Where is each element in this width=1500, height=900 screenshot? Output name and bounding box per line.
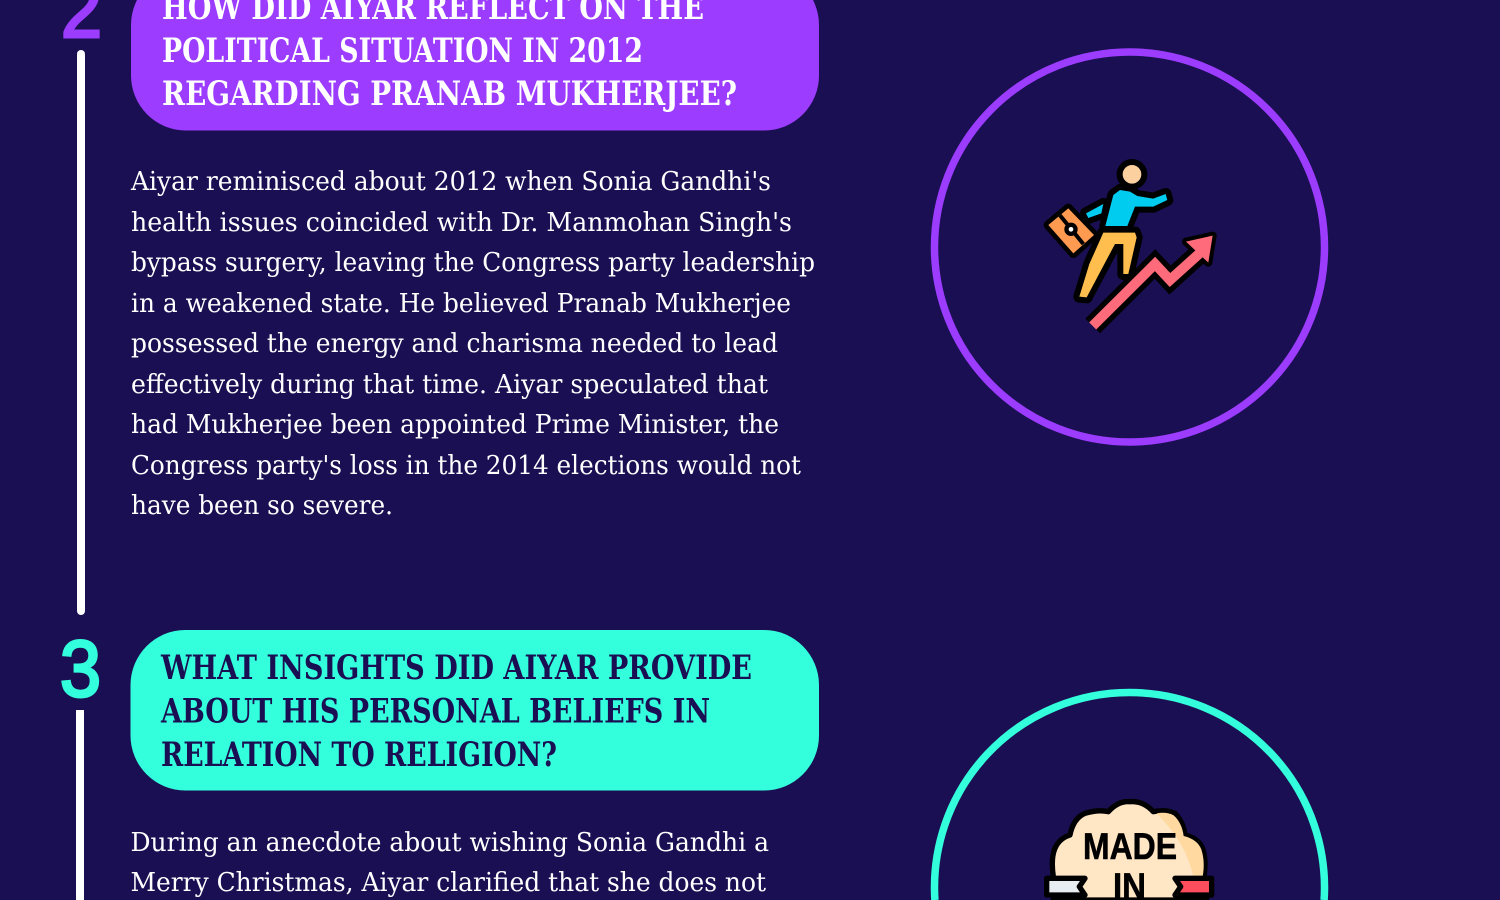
icon part: legs xyxy=(1079,233,1137,297)
badge shaded edge xyxy=(1157,813,1204,877)
icon part: briefcase xyxy=(1048,208,1094,253)
badge scalloped body xyxy=(1052,802,1207,900)
section 2 body text xyxy=(130,167,815,521)
badge text xyxy=(1083,826,1177,900)
section 2 heading pill xyxy=(131,0,819,130)
section 3 heading pill xyxy=(130,630,819,790)
section 3 body text: During an anecdote about wishing Sonia Gandhi a xyxy=(130,828,769,858)
timeline line: section 3 xyxy=(76,710,84,900)
section 3 icon circle xyxy=(935,693,1324,900)
icon: businessman climbing rising arrow xyxy=(1048,165,1213,326)
section 2 body text: Congress party's loss in the 2014 elections would not xyxy=(131,451,802,481)
section 2 heading pill: POLITICAL SITUATION IN 2012 xyxy=(162,31,643,70)
section 2 body text: effectively during that time. Aiyar speculated that xyxy=(131,370,769,400)
icon: made in badge xyxy=(1047,802,1212,900)
icon part: torso and arms xyxy=(1086,190,1167,226)
badge ribbon right xyxy=(1175,878,1212,895)
section 2 body text: bypass surgery, leaving the Congress party leadership xyxy=(131,248,815,278)
section 3 heading pill: WHAT INSIGHTS DID AIYAR PROVIDE xyxy=(160,648,752,687)
badge ribbon left xyxy=(1047,878,1085,895)
section 2 body text: had Mukherjee been appointed Prime Minister, the xyxy=(131,410,779,440)
section 2 heading pill: REGARDING PRANAB MUKHERJEE? xyxy=(162,74,737,113)
section 2 body text: in a weakened state. He believed Pranab Mukherjee xyxy=(131,289,791,319)
section 2 body text: Aiyar reminisced about 2012 when Sonia Gandhi's xyxy=(130,167,771,197)
badge text: MADE xyxy=(1083,826,1177,867)
section 2 icon circle xyxy=(934,52,1324,442)
section 2 body text: health issues coincided with Dr. Manmohan Singh's xyxy=(131,208,792,238)
section 3 number: 3 xyxy=(60,624,101,713)
section 3 body text: Merry Christmas, Aiyar clarified that she does not xyxy=(130,868,767,898)
section 3 body text xyxy=(130,828,769,898)
section 2 body text: have been so severe. xyxy=(131,491,393,521)
icon part: rising arrow xyxy=(1093,236,1213,326)
section 2 body text: possessed the energy and charisma needed to lead xyxy=(131,329,778,359)
section 3 heading pill: ABOUT HIS PERSONAL BELIEFS IN xyxy=(160,692,710,730)
icon part: head xyxy=(1123,165,1141,184)
timeline line: section 2 xyxy=(77,50,85,615)
section 3 heading pill: RELATION TO RELIGION? xyxy=(161,735,557,774)
